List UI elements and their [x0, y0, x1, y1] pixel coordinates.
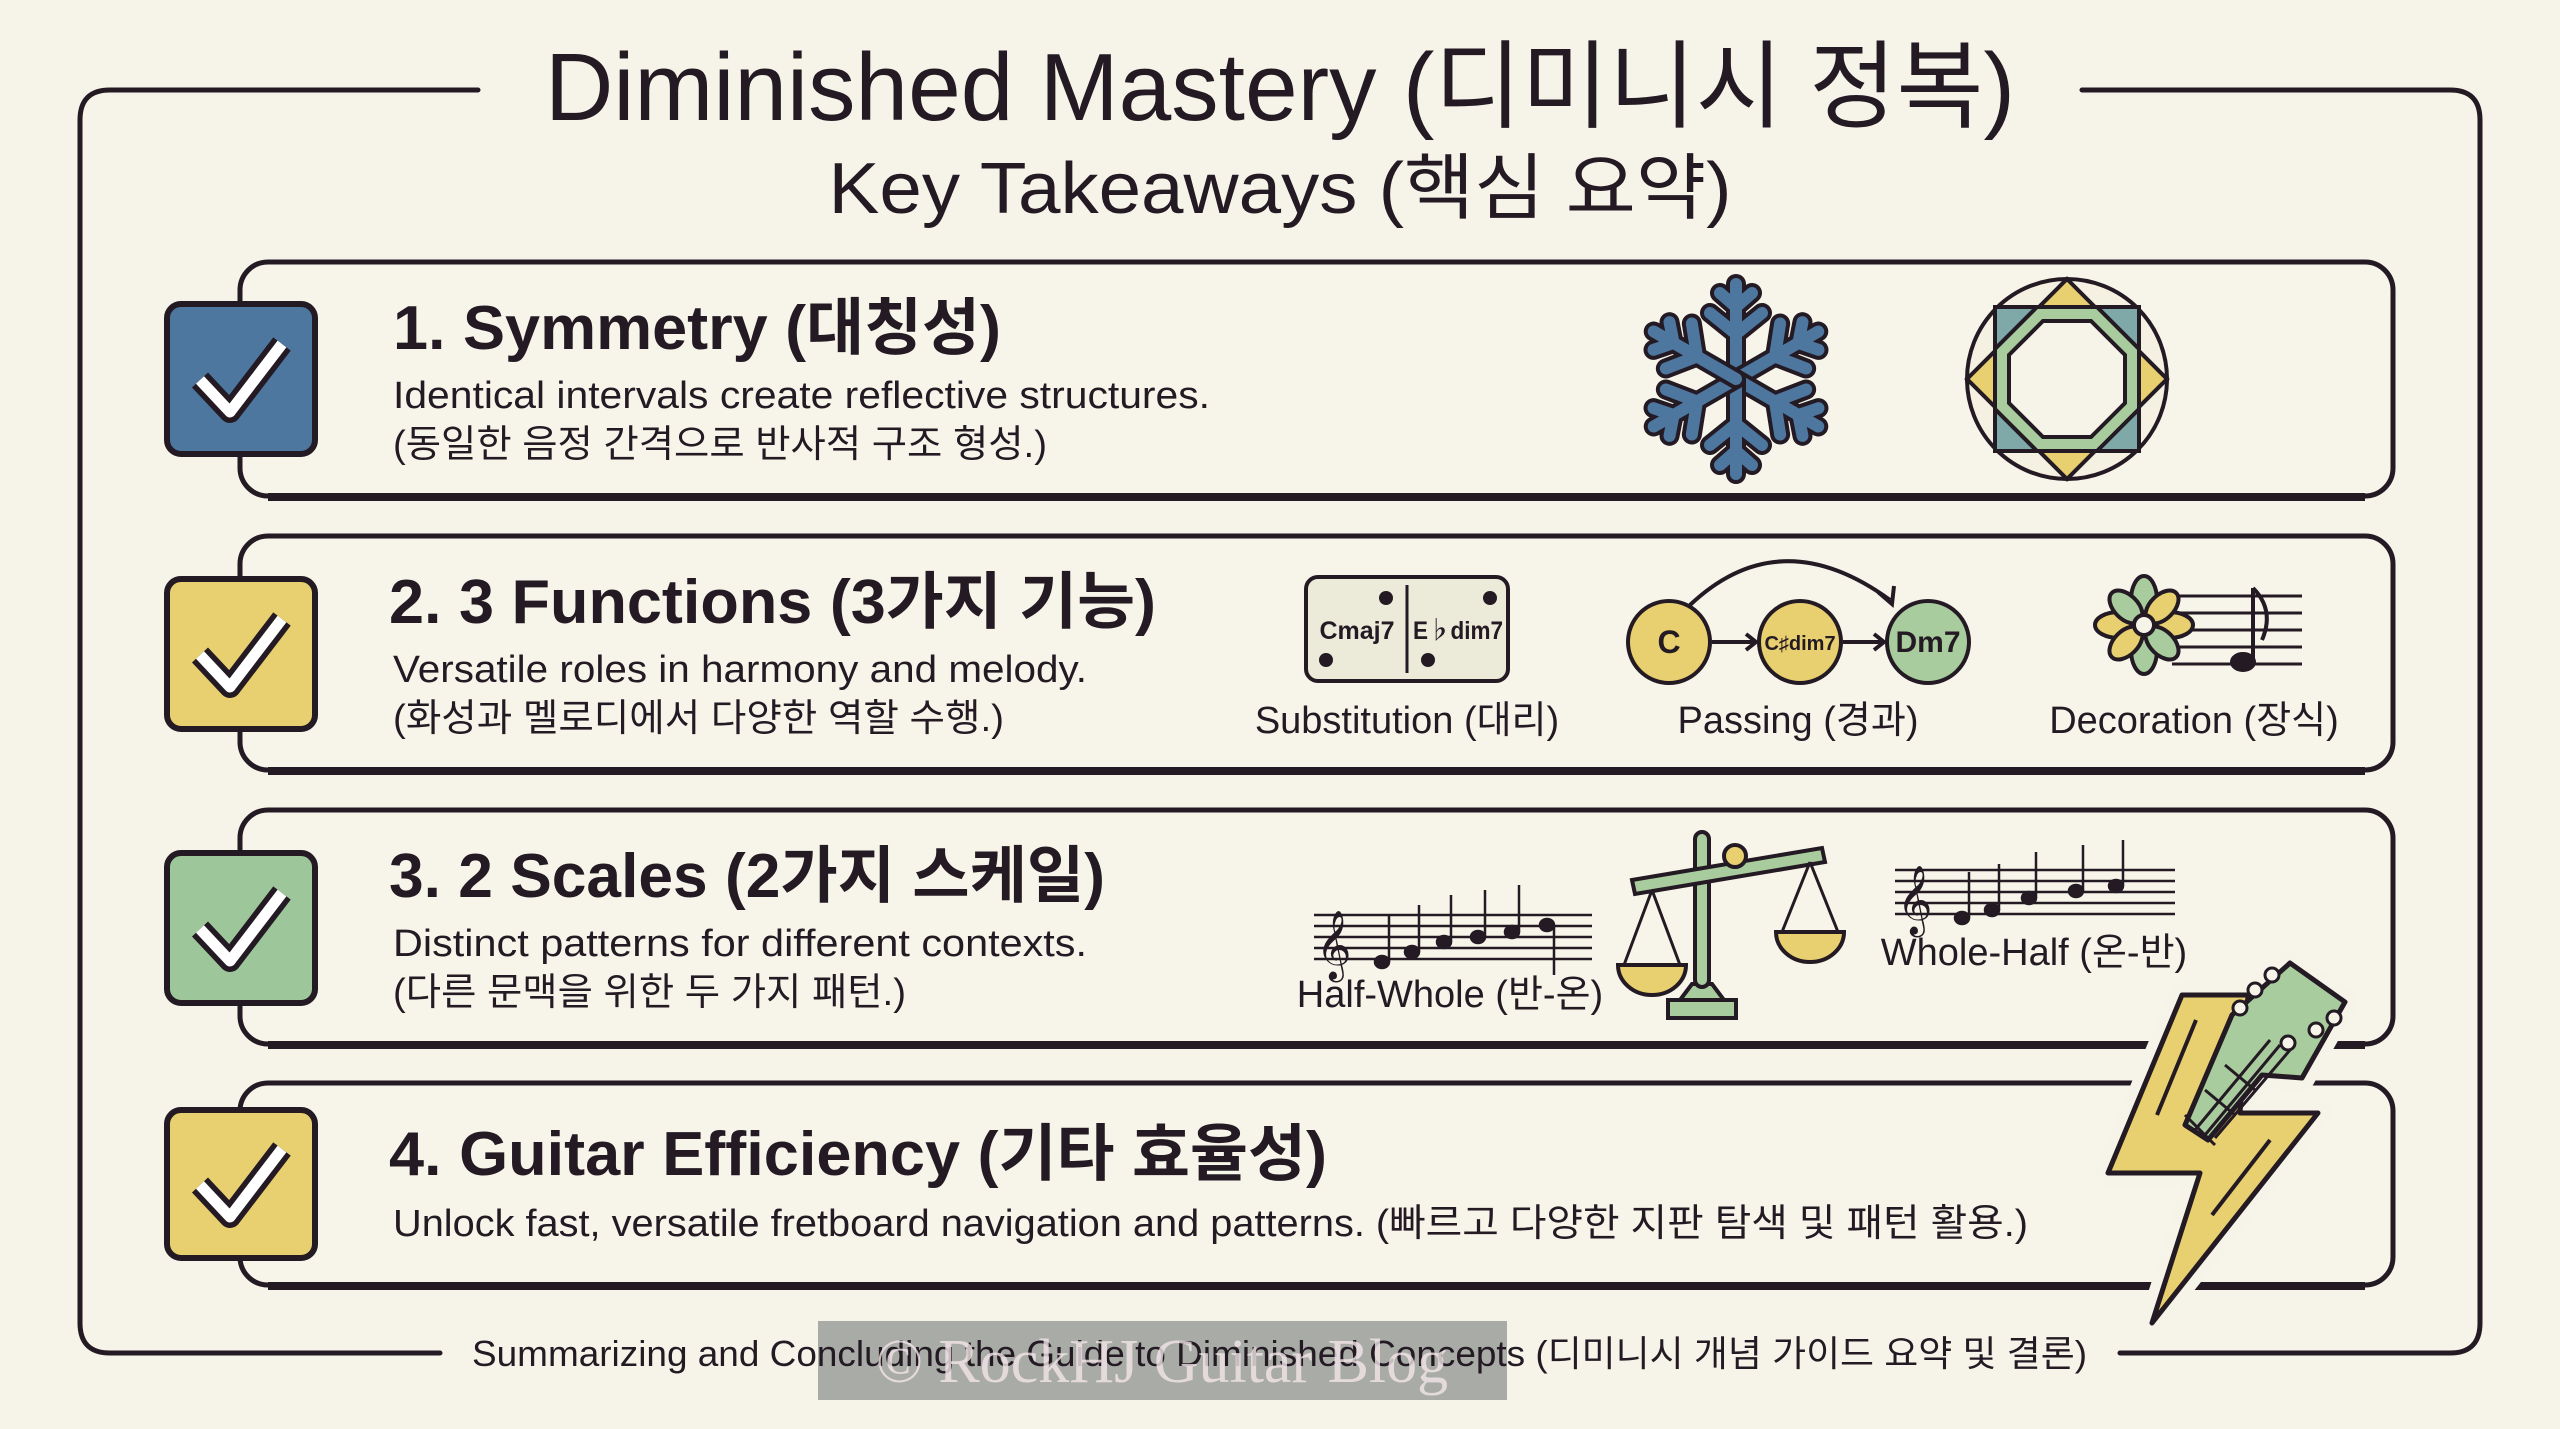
- checkbox: blue: [167, 304, 315, 454]
- icon: half-whole staff: 𝄞: [1316, 911, 1351, 982]
- heading 4: 4. Guitar Efficiency (기타 효율성): [389, 1120, 1327, 1189]
- panel 3: scales: [167, 810, 2393, 1045]
- icon: substitution card: Cmaj7: [1319, 617, 1395, 645]
- watermark box: [818, 1321, 1507, 1400]
- description 4: Unlock fast, versatile fretboard navigation and patterns. (빠르고 다양한 지판 탐색 및 패턴 활용.): [393, 1203, 2028, 1245]
- panel 2: functions: [167, 536, 2393, 771]
- icon: passing chords: [1628, 561, 1969, 683]
- heading 1: 1. Symmetry (대칭성): [393, 294, 1001, 363]
- label: passing: Passing (경과): [1678, 700, 1918, 742]
- description 1: [393, 375, 1210, 466]
- checkbox: yellow: [167, 1110, 315, 1258]
- icon: half-whole staff: [1314, 885, 1592, 982]
- icon: balance scale: [1618, 832, 1844, 1018]
- description 1: (동일한 음정 간격으로 반사적 구조 형성.): [393, 424, 1047, 466]
- icon: whole-half staff: 𝄞: [1897, 866, 1932, 937]
- footer text: Summarizing and Concluding the Guide to Diminished Concepts (디미니시 개념 가이드 요약 및 결론): [472, 1333, 2087, 1374]
- label: decoration: Decoration (장식): [2049, 700, 2339, 742]
- description 3: [393, 923, 1087, 1014]
- watermark text: © RockHJ Guitar Blog: [876, 1328, 1448, 1396]
- icon: whole-half staff: [1895, 840, 2175, 937]
- heading 3: 3. 2 Scales (2가지 스케일): [389, 842, 1105, 911]
- icon: passing chords: C: [1657, 624, 1681, 660]
- description 2: Versatile roles in harmony and melody.: [393, 649, 1087, 691]
- checkbox: green: [167, 853, 315, 1003]
- icon: substitution card: E♭dim7: [1413, 617, 1503, 645]
- icon: lightning guitar: [2108, 963, 2345, 1323]
- icon: passing chords: C♯dim7: [1764, 633, 1836, 655]
- panel 1: symmetry: [167, 262, 2393, 497]
- icon: substitution card: [1306, 577, 1508, 681]
- icon: snowflake: [1641, 284, 1831, 474]
- description 1: Identical intervals create reflective structures.: [393, 375, 1210, 417]
- checkbox: yellow: [167, 579, 315, 729]
- icon: geometric circle: [1967, 279, 2167, 479]
- label: half-whole: Half-Whole (반-온): [1297, 974, 1603, 1016]
- description 3: (다른 문맥을 위한 두 가지 패턴.): [393, 972, 906, 1014]
- heading 2: 2. 3 Functions (3가지 기능): [389, 568, 1156, 637]
- label: substitution: Substitution (대리): [1255, 700, 1559, 742]
- label: whole-half: Whole-Half (온-반): [1881, 932, 2187, 974]
- description 2: (화성과 멜로디에서 다양한 역할 수행.): [393, 698, 1004, 740]
- subtitle: Key Takeaways (핵심 요약): [828, 149, 1732, 229]
- description 3: Distinct patterns for different contexts.: [393, 923, 1087, 965]
- title: Diminished Mastery (디미니시 정복): [545, 34, 2015, 141]
- icon: passing chords: Dm7: [1895, 626, 1961, 659]
- panel 4: guitar efficiency: [167, 1083, 2393, 1286]
- description 2: [393, 649, 1087, 740]
- icon: decoration flower and staff: [2095, 576, 2302, 674]
